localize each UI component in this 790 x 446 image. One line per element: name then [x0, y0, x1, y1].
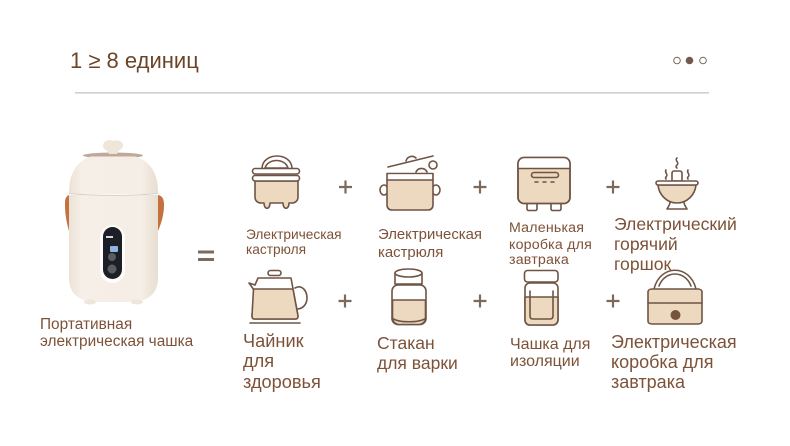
icon: brewing cup — [392, 269, 426, 324]
label: electric pot: кастрюля — [246, 242, 306, 257]
icon: electric hot pot — [656, 158, 698, 209]
label: health kettle: Чайник — [243, 331, 305, 351]
label: saucepan: Электрическая — [378, 227, 482, 243]
label: small breakfast box: коробка для — [509, 237, 592, 253]
label: brewing cup — [377, 333, 458, 373]
label: health kettle: здоровья — [243, 372, 321, 392]
label: small breakfast box: завтрака — [509, 252, 569, 268]
label: electric hot pot: горшок — [614, 254, 671, 274]
label: electric hot pot — [614, 214, 737, 274]
label: electric breakfast box — [611, 332, 737, 392]
icon: insulated cup — [524, 270, 558, 325]
label: small breakfast box: Маленькая — [509, 220, 584, 236]
label: health kettle — [243, 331, 321, 392]
label: electric breakfast box: завтрака — [611, 372, 686, 392]
label: electric breakfast box: коробка для — [611, 352, 713, 372]
icon: electric breakfast box — [648, 270, 702, 324]
icon: saucepan — [380, 156, 440, 210]
plus — [606, 294, 620, 308]
label: portable electric cup — [40, 316, 194, 350]
label: small breakfast box — [509, 220, 592, 268]
plus — [606, 180, 620, 194]
label: portable electric cup: Портативная — [40, 316, 132, 333]
icon: electric pot — [252, 156, 300, 208]
plus — [474, 294, 486, 308]
product: portable electric cup — [65, 140, 164, 304]
plus — [474, 180, 486, 194]
plus — [338, 294, 352, 308]
label: electric hot pot: горячий — [614, 234, 678, 254]
equals sign — [198, 250, 214, 261]
label: insulated cup — [510, 336, 590, 370]
label: brewing cup: Стакан — [377, 333, 435, 353]
label: saucepan — [378, 227, 482, 261]
label: portable electric cup: электрическая чашка — [40, 333, 194, 350]
icon: small breakfast box — [518, 158, 570, 210]
icon: health kettle — [249, 270, 307, 323]
label: electric pot — [246, 227, 342, 257]
label: health kettle: для — [243, 351, 274, 371]
label: insulated cup: Чашка для — [510, 336, 590, 353]
label: saucepan: кастрюля — [378, 245, 443, 261]
label: electric breakfast box: Электрическая — [611, 332, 737, 352]
label: electric hot pot: Электрический — [614, 214, 737, 234]
title: 1 ≥ 8 единиц — [70, 48, 199, 73]
pagination dots — [674, 57, 706, 64]
label: brewing cup: для варки — [377, 353, 458, 373]
plus — [339, 180, 352, 194]
label: electric pot: Электрическая — [246, 227, 342, 242]
label: insulated cup: изоляции — [510, 353, 580, 370]
